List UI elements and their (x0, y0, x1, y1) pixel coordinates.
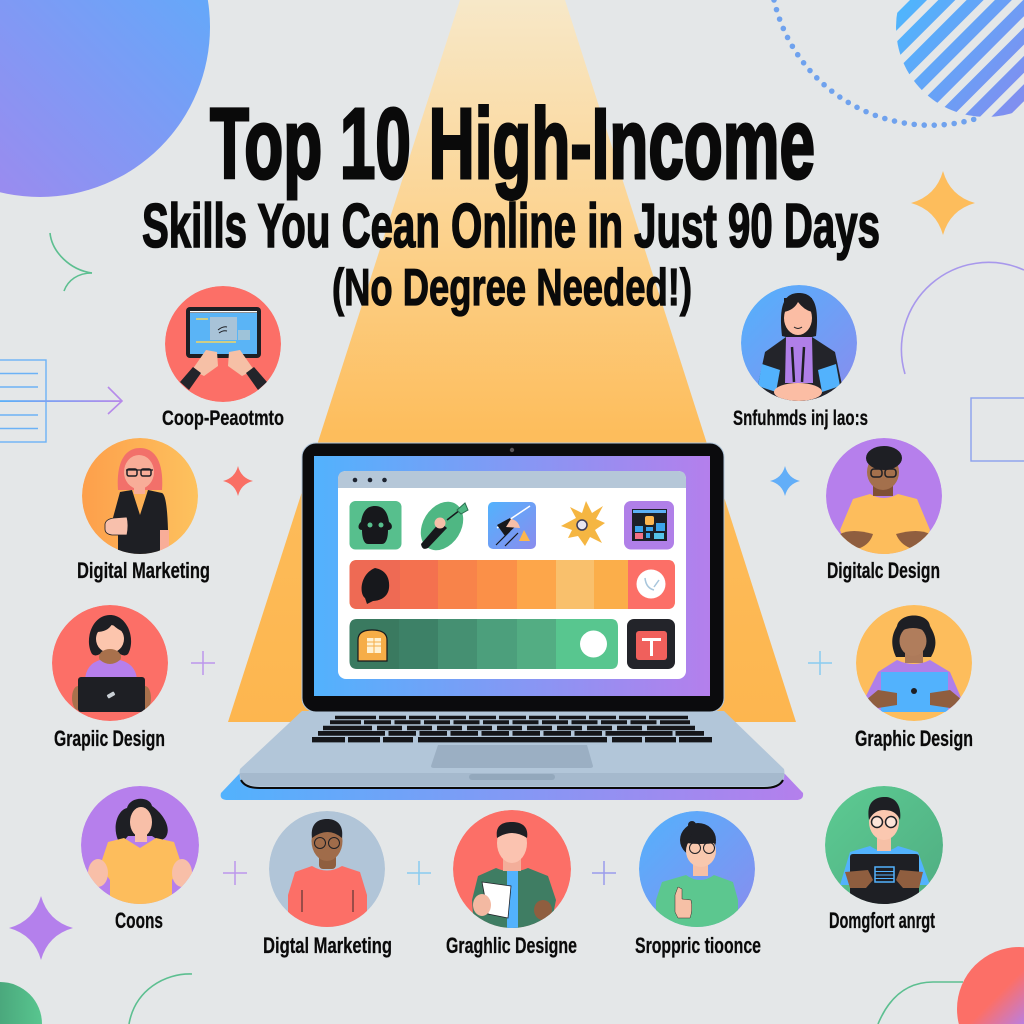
label: Snfuhmds inj lao:s (733, 407, 868, 430)
hair (866, 446, 902, 470)
person: woman on laptop (52, 605, 168, 721)
label: Coons (115, 908, 163, 933)
decoration: bottom-left green circle (0, 982, 42, 1024)
tablet (850, 854, 919, 905)
person: man with paper (453, 810, 571, 930)
hair (116, 799, 168, 841)
face (96, 625, 124, 653)
base front edge (240, 773, 784, 786)
person: woman in yellow polo (81, 786, 199, 905)
thumbs-up hand (675, 887, 692, 918)
decoration: bottom-right green curve (878, 982, 963, 1024)
label: Graphic Design (855, 726, 973, 751)
decoration: yellow sparkle (911, 171, 975, 235)
decoration: red sparkle (223, 466, 253, 496)
sleeves (758, 364, 780, 392)
face (124, 455, 154, 489)
screen wallpaper (314, 456, 710, 696)
icon: T button (627, 619, 675, 669)
neck and head (693, 860, 708, 876)
hands (774, 383, 822, 401)
person: suited person (741, 285, 857, 402)
orange progress bar (350, 560, 675, 609)
hands (866, 690, 897, 708)
neck and head (319, 852, 336, 869)
dark blob icon (362, 568, 389, 604)
purple shirt and tie (785, 337, 813, 383)
label: Grapiic Design (54, 726, 165, 751)
person: red-haired woman (82, 438, 198, 556)
neck and head (503, 855, 521, 871)
label: Domgfort anrgt (829, 908, 935, 933)
shirt (85, 660, 137, 677)
keyboard (312, 718, 712, 740)
laptop (221, 443, 803, 800)
hands (192, 350, 218, 376)
person: man with dark tablet (825, 786, 943, 905)
shirt (288, 866, 367, 930)
label: Coop-Peaotmto (162, 407, 284, 430)
icon: yellow splash (561, 501, 605, 546)
hair (892, 616, 935, 657)
title (142, 88, 880, 317)
person: man in yellow shirt (826, 438, 942, 556)
laptop screen bezel (302, 443, 724, 712)
neck and head (873, 486, 893, 496)
person: woman giving thumbs up (639, 811, 755, 930)
jacket (758, 337, 842, 402)
hands (840, 531, 873, 548)
hair (312, 819, 342, 838)
jacket (472, 868, 556, 930)
decoration: green curved lines (50, 233, 92, 291)
hands (88, 859, 108, 887)
shirt (865, 660, 962, 712)
person: woman with blue tablet (856, 605, 972, 721)
neck (99, 649, 121, 665)
icon: purple dashboard tile (624, 501, 674, 550)
laptop platform shadow (221, 773, 803, 800)
window title bar (338, 471, 686, 488)
laptop base (240, 711, 784, 788)
label: Graghlic Designe (446, 933, 577, 958)
label: Sroppric tioonce (635, 933, 761, 958)
decoration: striped circle (896, 0, 1024, 117)
hands (473, 894, 491, 916)
top (111, 490, 168, 556)
label: Digtal Marketing (263, 933, 392, 958)
glasses (690, 842, 700, 854)
paper (482, 882, 511, 918)
glasses (126, 469, 153, 471)
hair (781, 293, 817, 338)
hair (868, 797, 900, 820)
person: hands on tablet (165, 286, 281, 402)
tablet (881, 672, 948, 712)
hair (118, 448, 162, 490)
shirt (100, 838, 182, 905)
white circle (580, 630, 607, 658)
decoration: bottom-left green arc (129, 974, 192, 1024)
label: Digital Marketing (77, 558, 210, 583)
face and neck (905, 651, 923, 663)
icon: green leaf with brush (412, 494, 472, 558)
hand (105, 517, 128, 535)
title line 3: (No Degree Needed!) (332, 259, 692, 317)
decoration: outlined box right (971, 398, 1024, 461)
decoration: bottom-right gradient circle (957, 947, 1024, 1024)
decoration: top-right dotted arc (774, 0, 975, 125)
hair (497, 822, 527, 838)
trackpad (431, 745, 593, 768)
decoration: plus signs (191, 651, 832, 885)
icon: blue-purple paint tile (488, 502, 536, 549)
hair and bun (688, 821, 696, 829)
shirt (656, 875, 738, 930)
shirt (840, 494, 930, 556)
person: man in red shirt (269, 811, 385, 930)
laptop (78, 677, 145, 712)
face (130, 807, 152, 837)
decoration: top-left gradient circle (0, 0, 210, 197)
arms (72, 686, 78, 710)
hands (845, 870, 873, 888)
shirt (840, 846, 930, 885)
orange document icon (358, 630, 387, 661)
glasses (314, 838, 326, 848)
webcam (510, 448, 514, 452)
clock icon (636, 570, 666, 598)
hinge notch (469, 774, 555, 780)
glasses (871, 469, 882, 477)
green progress bar (350, 619, 618, 669)
decoration: purple arc right (901, 262, 1024, 374)
decoration: list box with arrow (0, 360, 122, 442)
tablet (186, 307, 261, 358)
face (784, 301, 812, 335)
neck and head (877, 835, 891, 851)
glasses (872, 816, 882, 828)
app window (338, 471, 686, 679)
decoration: blue sparkle (770, 466, 800, 496)
label: Digitalc Design (827, 558, 940, 583)
hair (89, 615, 131, 656)
icon: green tile (350, 501, 402, 550)
yellow spotlight beam (228, 0, 796, 722)
decoration: purple sparkle (9, 896, 73, 960)
